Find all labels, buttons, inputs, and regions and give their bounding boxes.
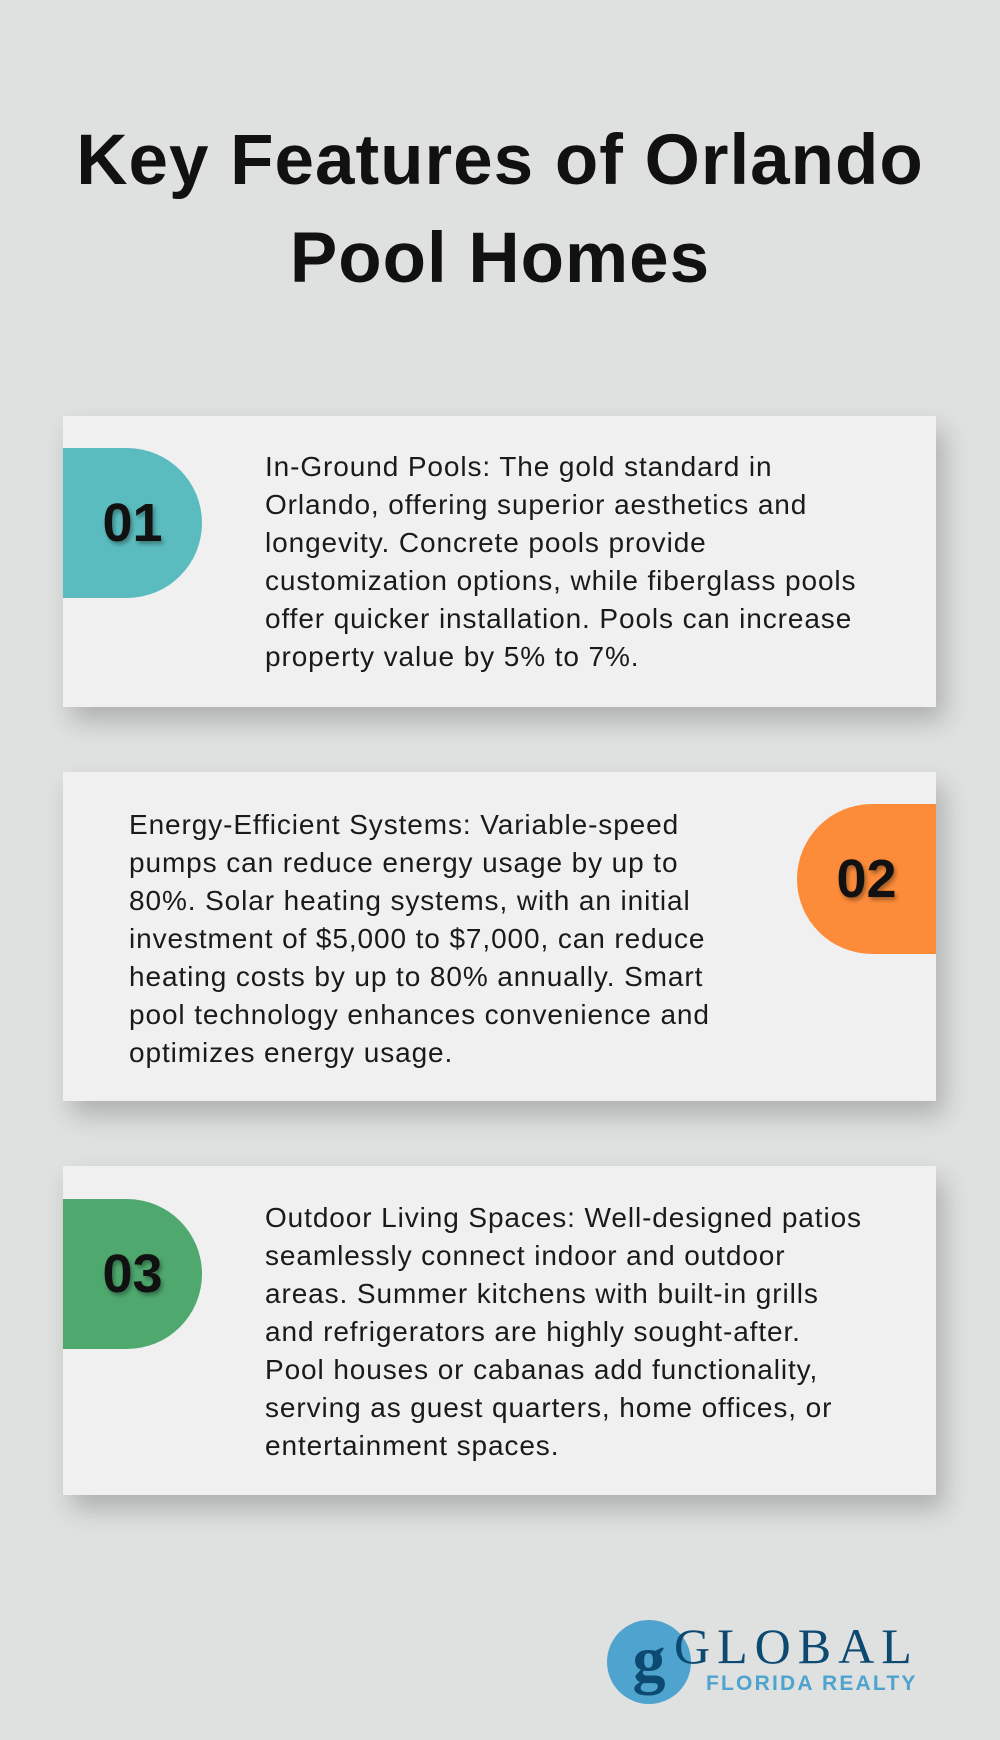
text 01: property value by 5% to 7%. [265,641,640,672]
badge 03 [63,1199,202,1349]
text 03 [265,1202,862,1461]
icon: g circle [607,1620,691,1704]
text 02: investment of $5,000 to $7,000, can reduce [129,923,705,954]
text 01: customization options, while fiberglass pools [265,565,856,596]
panel: card 02 [63,772,936,1101]
text 02: pool technology enhances convenience and [129,999,710,1030]
icon: g circle: g [632,1623,666,1696]
text 01: longevity. Concrete pools provide [265,527,707,558]
badge 01: 01 [102,493,163,553]
text 03: areas. Summer kitchens with built-in grills [265,1278,819,1309]
text 02: optimizes energy usage. [129,1037,453,1068]
panel: card 03 [63,1166,936,1495]
badge 03: 03 [102,1244,163,1304]
text 03: seamlessly connect indoor and outdoor [265,1240,785,1271]
text 03: serving as guest quarters, home offices, or [265,1392,832,1423]
text 01: In-Ground Pools: The gold standard in [265,451,773,482]
panel: card 01 [63,416,936,707]
logo [607,1618,919,1704]
text 01: Orlando, offering superior aesthetics and [265,489,807,520]
text 02: Energy-Efficient Systems: Variable-speed [129,809,679,840]
text 02: 80%. Solar heating systems, with an initial [129,885,691,916]
title: Pool Homes [290,219,710,298]
badge 02: 02 [836,849,897,909]
text 01: offer quicker installation. Pools can increase [265,603,852,634]
logo text FLORIDA REALTY: FLORIDA REALTY [706,1672,918,1695]
text 03: entertainment spaces. [265,1430,559,1461]
text 02: pumps can reduce energy usage by up to [129,847,678,878]
badge 01 [63,448,202,598]
badge 02 [797,804,936,954]
text 01 [265,451,856,672]
text 02 [129,809,710,1068]
title: Key Features of Orlando [76,121,924,200]
text 03: and refrigerators are highly sought-after. [265,1316,801,1347]
logo text GLOBAL: GLOBAL [674,1618,919,1674]
text 03: Pool houses or cabanas add functionality, [265,1354,818,1385]
text 02: heating costs by up to 80% annually. Smart [129,961,703,992]
title [76,121,924,298]
text 03: Outdoor Living Spaces: Well-designed patios [265,1202,862,1233]
